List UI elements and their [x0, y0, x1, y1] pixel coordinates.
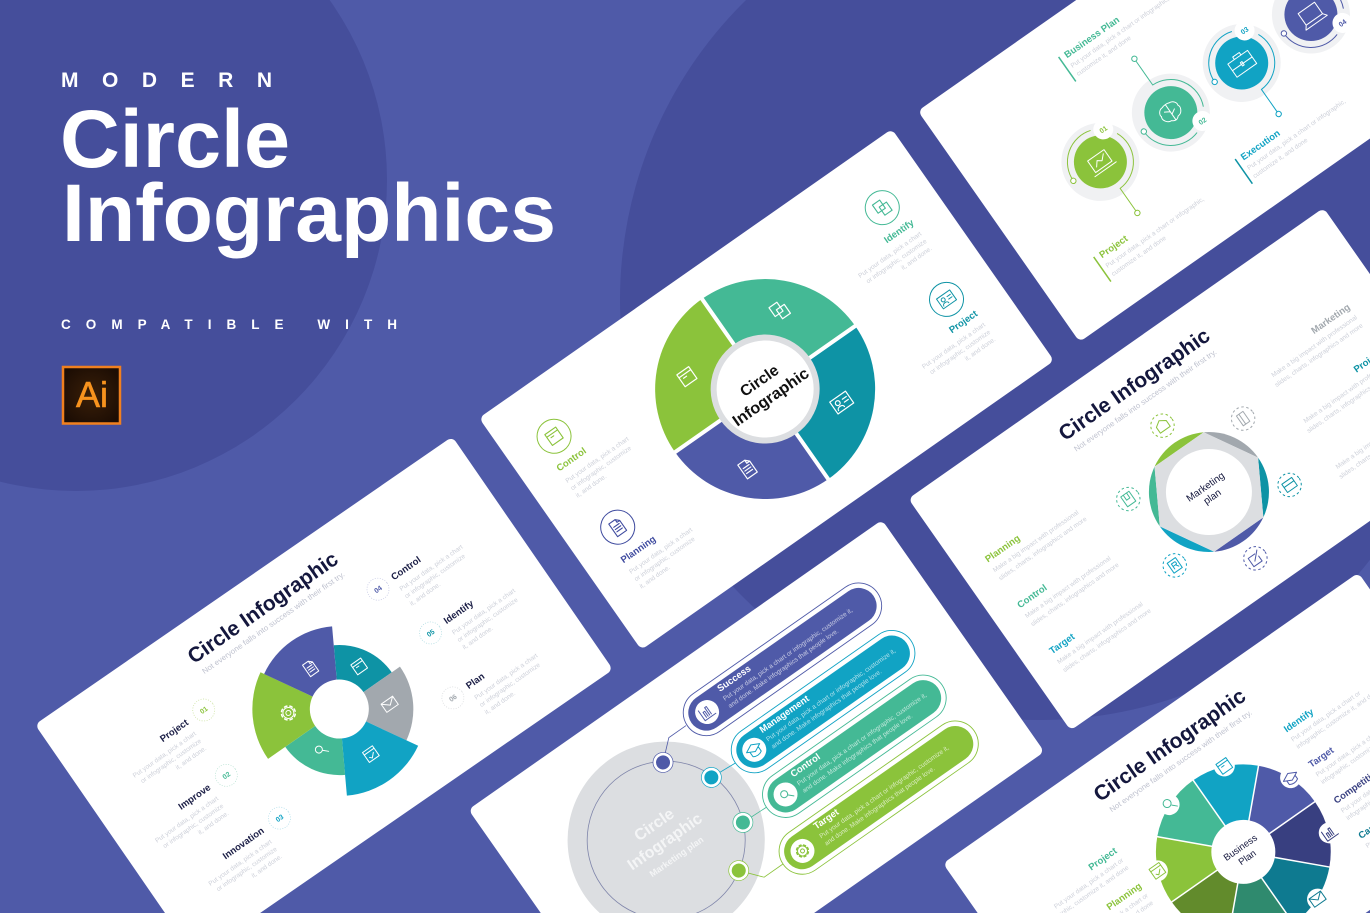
icon: Adobe Illustrator: Ai	[76, 374, 108, 415]
item control: or infographic, customize	[570, 445, 633, 492]
pill target	[770, 712, 987, 883]
notch icon: mail	[1303, 884, 1332, 913]
item 06 plan: Put your data, pick a chart	[473, 652, 539, 701]
label execution	[1234, 87, 1354, 184]
item 02 improve: Improve	[177, 782, 213, 813]
item 06 plan: 06	[448, 694, 459, 704]
label project: Project	[1097, 233, 1131, 261]
item 01 project: it, and done.	[175, 745, 208, 771]
compatible with: COMPATIBLE WITH	[61, 317, 397, 332]
item 06 plan: it, and done.	[484, 690, 517, 716]
donut chart: Infographic	[730, 365, 813, 430]
icon: note	[1227, 402, 1259, 435]
item marketing: Marketing	[1309, 302, 1353, 337]
item 01 project: Put your data, pick a chart	[132, 730, 198, 779]
item control	[530, 388, 641, 500]
item 04 control: Control	[389, 555, 423, 583]
item control: Control	[555, 446, 589, 474]
label business plan: Business Plan	[1062, 14, 1122, 61]
panel: slide with six-part pie, bottom left	[33, 434, 615, 913]
item control: Put your data, pick a chart	[564, 436, 630, 485]
wheel centre label: Business	[1222, 832, 1260, 864]
item 01 project: or infographic, customize	[140, 738, 203, 785]
item 01 project: Project	[158, 717, 191, 745]
item 03 innovation: Innovation	[221, 825, 267, 862]
label project: customize it, and done	[1110, 235, 1168, 278]
item 01 project: 01	[199, 706, 210, 716]
item 02 improve: Put your data, pick a chart	[154, 795, 220, 844]
slide title: Circle Infographic	[184, 547, 343, 669]
icon: copy	[769, 299, 790, 321]
panel: slide with pills, bottom centre	[468, 520, 1044, 913]
donut chart	[609, 233, 921, 545]
item 05 identify	[415, 570, 527, 668]
item control: it, and done.	[575, 473, 608, 499]
segmented wheel	[1115, 724, 1370, 913]
item planning: slides, charts, infographics and more	[998, 516, 1089, 582]
pill management	[722, 621, 924, 782]
item 03 innovation: 03	[275, 814, 285, 824]
item planning: Planning	[1105, 881, 1144, 913]
pill management: and done. Make infographics that people love.	[770, 668, 883, 750]
item planning: Make a big impact with professional	[992, 509, 1081, 574]
hexagon diagram: plan	[1202, 487, 1224, 507]
item project: Put your data, pick a chart or	[1053, 857, 1126, 911]
icon: document	[738, 458, 757, 479]
item target: Target	[1307, 745, 1337, 770]
slide title: Circle Infographic	[1090, 684, 1250, 807]
item planning: Put your data, pick a chart	[628, 527, 694, 576]
label execution: Put your data, pick a chart or infographic,	[1246, 98, 1347, 172]
background circle: top left	[0, 0, 387, 491]
item identify: Identify	[1282, 706, 1317, 735]
notch icon: graduation cap	[1276, 763, 1305, 792]
pill success: Success	[715, 663, 753, 695]
hexagon centre label: Marketing	[1185, 470, 1227, 505]
slide subtitle: Not everyone falls into success with their first try.	[200, 570, 346, 676]
icon: mail open	[1146, 409, 1179, 442]
item target	[1307, 704, 1370, 786]
item target	[1047, 587, 1153, 674]
item planning: it, and done.	[638, 564, 672, 590]
step 03	[1187, 9, 1311, 139]
item planning	[983, 495, 1089, 582]
label business plan: customize it, and done	[1075, 35, 1133, 78]
item identify	[1282, 668, 1370, 751]
item control: Make a big impact with professional	[1024, 555, 1113, 620]
background circle: right	[620, 0, 1370, 720]
item identify: or infographic, customize	[865, 238, 929, 285]
pill management: Put your data, pick a chart or infographic, customize it,	[765, 648, 897, 743]
item planning: or infographic, customize	[633, 536, 697, 583]
item competition	[1332, 740, 1370, 822]
icon: document	[303, 659, 319, 677]
item project: it, and done.	[964, 336, 997, 363]
slide subtitle: Not everyone falls into success with their first try.	[1108, 708, 1254, 814]
item project: Put your data, pick a chart	[921, 321, 987, 371]
notch icon: folder	[1210, 751, 1239, 781]
icon: gear	[279, 703, 298, 723]
item 04 control: it, and done.	[409, 581, 442, 608]
segmented wheel: Plan	[1237, 848, 1259, 868]
item project	[1292, 347, 1370, 435]
item 05 identify: Identify	[442, 598, 476, 627]
step 01: 01	[1099, 125, 1109, 135]
node seagreen	[729, 809, 757, 836]
item project	[1031, 845, 1131, 913]
large gray circle: Infographic	[625, 810, 706, 874]
panel: slide with four-part donut, centre	[479, 129, 1054, 650]
item 05 identify: Put your data, pick a chart	[451, 587, 517, 637]
item project: Project	[947, 308, 981, 336]
item 02 improve	[142, 760, 256, 859]
connector lines	[653, 715, 799, 887]
pill control: Control	[789, 752, 823, 780]
panel: slide with hexagon, right	[908, 208, 1370, 730]
icon: box	[677, 367, 697, 387]
icon: clipboard	[1112, 483, 1145, 515]
step 04: 04	[1338, 19, 1348, 29]
item identify: Put your data, pick a chart	[857, 231, 923, 280]
step 01	[1046, 108, 1170, 238]
item planning	[594, 479, 704, 591]
pill success	[674, 574, 891, 745]
item 06 plan: or infographic, customize	[479, 661, 542, 709]
pill control: Put your data, pick a chart or infographic, customize it,	[796, 692, 928, 787]
item 04 control: Put your data, pick a chart	[398, 544, 464, 593]
title: circle: Circle	[60, 94, 290, 185]
node indigo	[649, 749, 677, 776]
large gray circle	[529, 703, 804, 913]
notch icon: pin	[1154, 790, 1184, 819]
node green	[725, 857, 753, 884]
label execution: Execution	[1239, 128, 1283, 163]
item 04 control	[363, 526, 475, 624]
item planning: Planning	[619, 534, 658, 566]
item 02 improve: 02	[222, 771, 232, 781]
item target: Make a big impact with professional	[1056, 601, 1145, 666]
pill control: and done. Make infographics that people love.	[801, 713, 914, 795]
title: infographics: Infographics	[62, 168, 556, 259]
icon: search	[314, 743, 329, 757]
label project: Put your data, pick a chart or infographic,	[1105, 196, 1206, 270]
icon: folder	[1273, 469, 1306, 501]
pill target: and done. Make infographics that people love.	[824, 765, 937, 847]
pill success: and done. Make infographics that people love.	[727, 628, 840, 710]
icon: calendar check	[363, 746, 379, 762]
item identify: Put your data, pick a chart or	[1290, 689, 1363, 743]
step 02	[1100, 35, 1225, 167]
notch icon: calendar	[1143, 856, 1172, 885]
item campaign	[1357, 775, 1370, 857]
item 04 control: 04	[373, 585, 384, 595]
item 01 project	[119, 695, 233, 794]
item project: or infographic, customize	[929, 329, 992, 376]
step 04	[1243, 0, 1365, 69]
item project: Project	[1087, 845, 1120, 873]
eyebrow: modern: MODERN	[61, 69, 272, 92]
large gray circle: Marketing plan	[648, 834, 705, 879]
item control: Control	[1015, 583, 1049, 611]
item planning: Planning	[983, 533, 1023, 565]
item control	[1015, 541, 1121, 628]
slide subtitle: Not everyone falls into success with their first try.	[1072, 347, 1218, 453]
label project	[1093, 184, 1212, 282]
item 05 identify: it, and done.	[461, 625, 495, 651]
item target: slides, charts, infographics and more	[1062, 607, 1153, 674]
step 03: 03	[1240, 26, 1250, 36]
hexagon diagram	[1089, 369, 1329, 615]
slide title: Circle Infographic	[1055, 324, 1215, 446]
node cyan	[697, 763, 725, 791]
heading block	[60, 69, 556, 332]
icon: edit	[1239, 542, 1272, 575]
item 03 innovation: it, and done.	[250, 853, 284, 880]
icon: id	[1158, 549, 1191, 582]
item 06 plan: Plan	[464, 671, 487, 692]
item 05 identify: 05	[426, 629, 436, 639]
step 02: 02	[1198, 117, 1208, 127]
icon: mail	[381, 696, 398, 712]
item project	[889, 275, 998, 385]
pill management: Management	[758, 693, 812, 736]
item target: Target	[1047, 631, 1078, 657]
item marketing: Make a big impact with professional	[1270, 314, 1359, 379]
notch icon: bar chart	[1315, 818, 1344, 847]
item 03 innovation: or infographic, customize	[215, 846, 279, 893]
item identify	[825, 184, 934, 294]
item 04 control: or infographic, customize	[404, 553, 467, 600]
pill target: Put your data, pick a chart or infographic, customize it,	[818, 745, 951, 840]
icon: id card	[830, 391, 854, 414]
panel: slide with segmented wheel, bottom right	[943, 573, 1370, 913]
item identify: Identify	[882, 217, 917, 246]
item control: slides, charts, infographics and more	[1030, 561, 1121, 628]
item marketing	[1259, 302, 1365, 389]
large gray circle: Circle	[631, 805, 678, 845]
label execution: customize it, and done	[1252, 137, 1309, 180]
item 03 innovation: Put your data, pick a chart	[208, 838, 274, 888]
item marketing: slides, charts, infographics and more	[1274, 322, 1365, 389]
pill target: Target	[812, 806, 842, 832]
item 02 improve: it, and done.	[197, 810, 230, 836]
donut centre label: Circle	[737, 362, 783, 401]
pie chart	[220, 599, 450, 830]
item identify: it, and done.	[900, 245, 934, 272]
icon: Adobe Illustrator	[63, 367, 120, 424]
pill control	[754, 666, 955, 826]
panel: slide with four numbered circles, top right	[918, 0, 1370, 342]
pill success: Put your data, pick a chart or infographic, customize it,	[722, 607, 854, 702]
item 06 plan	[438, 635, 550, 733]
item 03 innovation	[195, 803, 309, 902]
icon: box	[351, 658, 368, 675]
item planning	[1055, 880, 1156, 913]
item 05 identify: or infographic, customize	[456, 597, 520, 644]
item 02 improve: or infographic, customize	[162, 803, 225, 850]
